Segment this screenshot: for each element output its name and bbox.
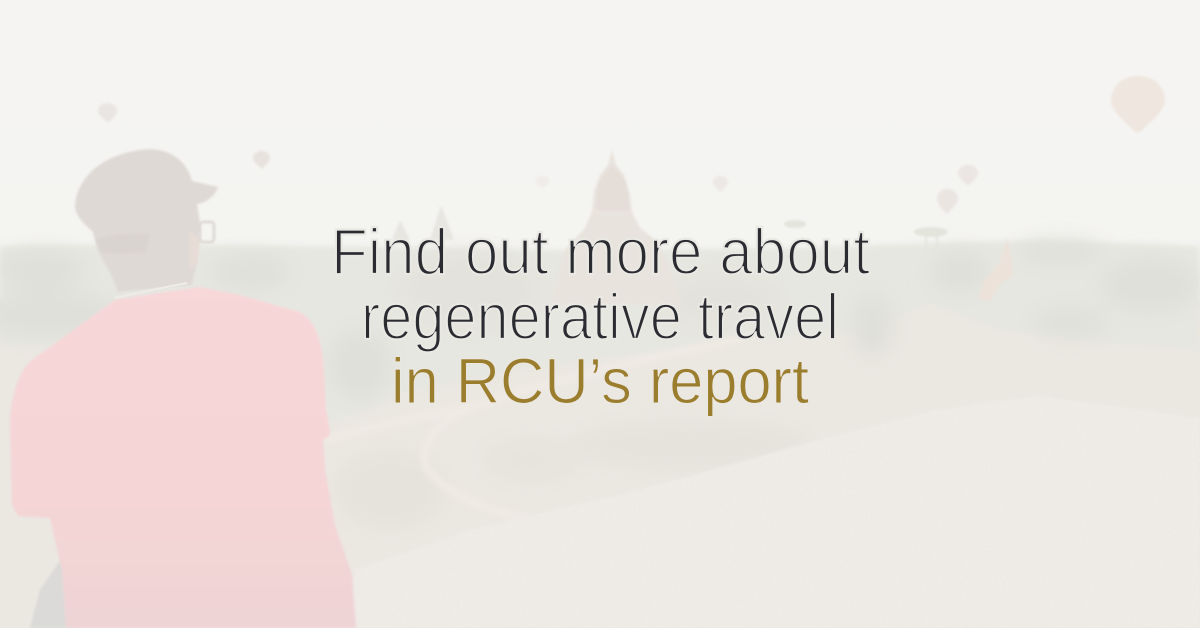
- bag strap: [30, 558, 72, 628]
- ear and skin: [190, 232, 200, 270]
- headline line 3 gold: in RCU’s report: [391, 345, 809, 417]
- necklace: [115, 283, 187, 298]
- distant pale path: [325, 335, 760, 520]
- shirt: [10, 287, 356, 628]
- tree line along the horizon: [0, 240, 1200, 528]
- hot air balloons: [98, 76, 1165, 214]
- stone platform foreground: [350, 396, 1200, 628]
- central temple: [392, 150, 682, 305]
- palm trees: [784, 220, 948, 251]
- small pagoda on the right: [978, 238, 1013, 302]
- ground plain: [0, 300, 1200, 628]
- man in red shirt seen from behind: [10, 149, 356, 628]
- headline line 2: regenerative travel: [361, 280, 839, 353]
- headline line 1: Find out more about: [331, 215, 870, 288]
- glasses: [200, 222, 214, 242]
- cap and head: [75, 149, 218, 292]
- headline: [331, 215, 870, 417]
